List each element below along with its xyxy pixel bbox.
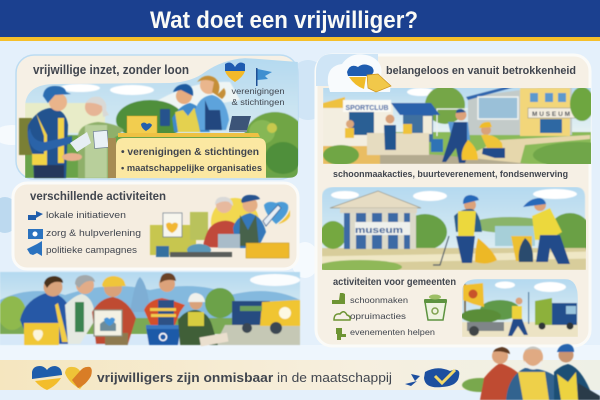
banner: onmisbaar <box>0 344 600 400</box>
illustration: sportclub en museum <box>323 88 591 164</box>
icon: hart met handdruk <box>65 367 92 389</box>
figure: vrouw met schort <box>195 76 229 130</box>
list item: evenementen helpen: evenementen helpen <box>350 327 435 337</box>
icon: recyclebak <box>146 325 181 345</box>
figure: oudere vrouw <box>62 97 124 178</box>
icon: hart <box>225 63 245 82</box>
text: kernboodschap: vrijwilligers zijn onmisbaar in de maatschappij <box>97 370 392 385</box>
label: verenigingen en stichtingen <box>232 86 285 107</box>
illustration: gemeente schoonmaak <box>461 279 578 337</box>
panel: vrijwillige inzet <box>16 55 307 179</box>
figure: oudere vrouw met bril <box>65 275 95 344</box>
heading: verschillende activiteiten: verschillende activiteiten <box>30 191 166 203</box>
callout: organisaties <box>108 138 266 178</box>
figure: vrouw met helm en poster <box>92 276 136 345</box>
label: museum: MUSEUM <box>532 111 570 118</box>
callout: organisaties: • maatschappelijke organisaties <box>121 163 262 174</box>
heading: activiteiten voor gemeenten: activiteiten voor gemeenten <box>333 277 456 288</box>
list item: lokale initiatieven: lokale initiatieven <box>46 210 126 221</box>
figure: vrijwilliger met grijper <box>433 195 497 265</box>
figure: vrijwilliger met prikstok <box>508 292 529 336</box>
figure: vrijwilliger met vuilniszak <box>442 109 478 163</box>
balie <box>118 133 260 137</box>
list item: schoonmaken <box>332 293 408 305</box>
list item: politieke campagnes <box>27 241 137 256</box>
museum gebouw <box>330 191 421 249</box>
icon: hart Nederland <box>32 366 62 390</box>
figure: knielende helper <box>178 293 228 346</box>
figure: hulpverlener <box>144 273 185 326</box>
panel: belangeloos en betrokkenheid <box>316 54 600 346</box>
label: verenigingen en stichtingen: verenigingen <box>232 86 285 96</box>
museum gebouw <box>466 83 575 136</box>
list item: zorg en hulpverlening: zorg & hulpverlening <box>46 228 141 239</box>
list item: evenementen helpen <box>336 327 435 340</box>
icon: prullenbak <box>424 294 447 320</box>
illustration: groep vrijwilligers <box>0 272 300 346</box>
illustration: museum en schoonmaak <box>318 187 592 274</box>
wagen met groen <box>461 309 504 336</box>
figure: drie vrijwilligers <box>462 344 600 400</box>
heading: vrijwillige inzet: vrijwillige inzet, zonder loon <box>33 63 189 77</box>
icon: wolk met hart en handschoen <box>316 54 391 92</box>
figure: vrijwilliger met afvalzak <box>511 198 570 264</box>
icon: donatiebox <box>127 116 157 135</box>
illustration: vrijwilligers met materialen <box>150 195 290 258</box>
figure: man met hesje <box>19 86 72 178</box>
figure: man met tas <box>20 276 72 345</box>
scene: vrijwilligers bij balie <box>25 58 307 178</box>
heading: belangeloos: belangeloos en vanuit betrokkenheid <box>386 65 576 77</box>
figure: knielende vrijwilligster <box>479 122 505 158</box>
callout: organisaties: • verenigingen & stichtingen <box>121 147 259 158</box>
label: museum: museum <box>355 225 403 236</box>
list item: opruimacties: opruimacties <box>350 311 406 321</box>
list item: opruimacties <box>334 311 406 321</box>
list item: schoonmaken: schoonmaken <box>350 295 408 305</box>
icon: documenten <box>70 130 109 152</box>
icon: vlag <box>256 68 272 86</box>
header banner <box>0 0 600 41</box>
label: sportclub: SPORTCLUB <box>346 105 388 112</box>
icon: vinkje <box>405 368 459 387</box>
icon: gele vlag <box>463 283 484 320</box>
title: Wat doet een vrijwilliger? <box>150 7 418 34</box>
list item: politieke campagnes: politieke campagnes <box>46 245 137 256</box>
sportclub kraam <box>323 97 443 165</box>
text: schoonmaakacties: schoonmaakacties, buurteverenement, fondsenwerving <box>333 169 568 180</box>
icon: laptop <box>229 116 251 132</box>
icon: groene vrachtwagen <box>535 298 577 330</box>
icon: vuilniswagen <box>232 300 300 334</box>
figure: vrouw met pet <box>160 84 210 132</box>
label: verenigingen en stichtingen: & stichtingen <box>232 97 285 107</box>
